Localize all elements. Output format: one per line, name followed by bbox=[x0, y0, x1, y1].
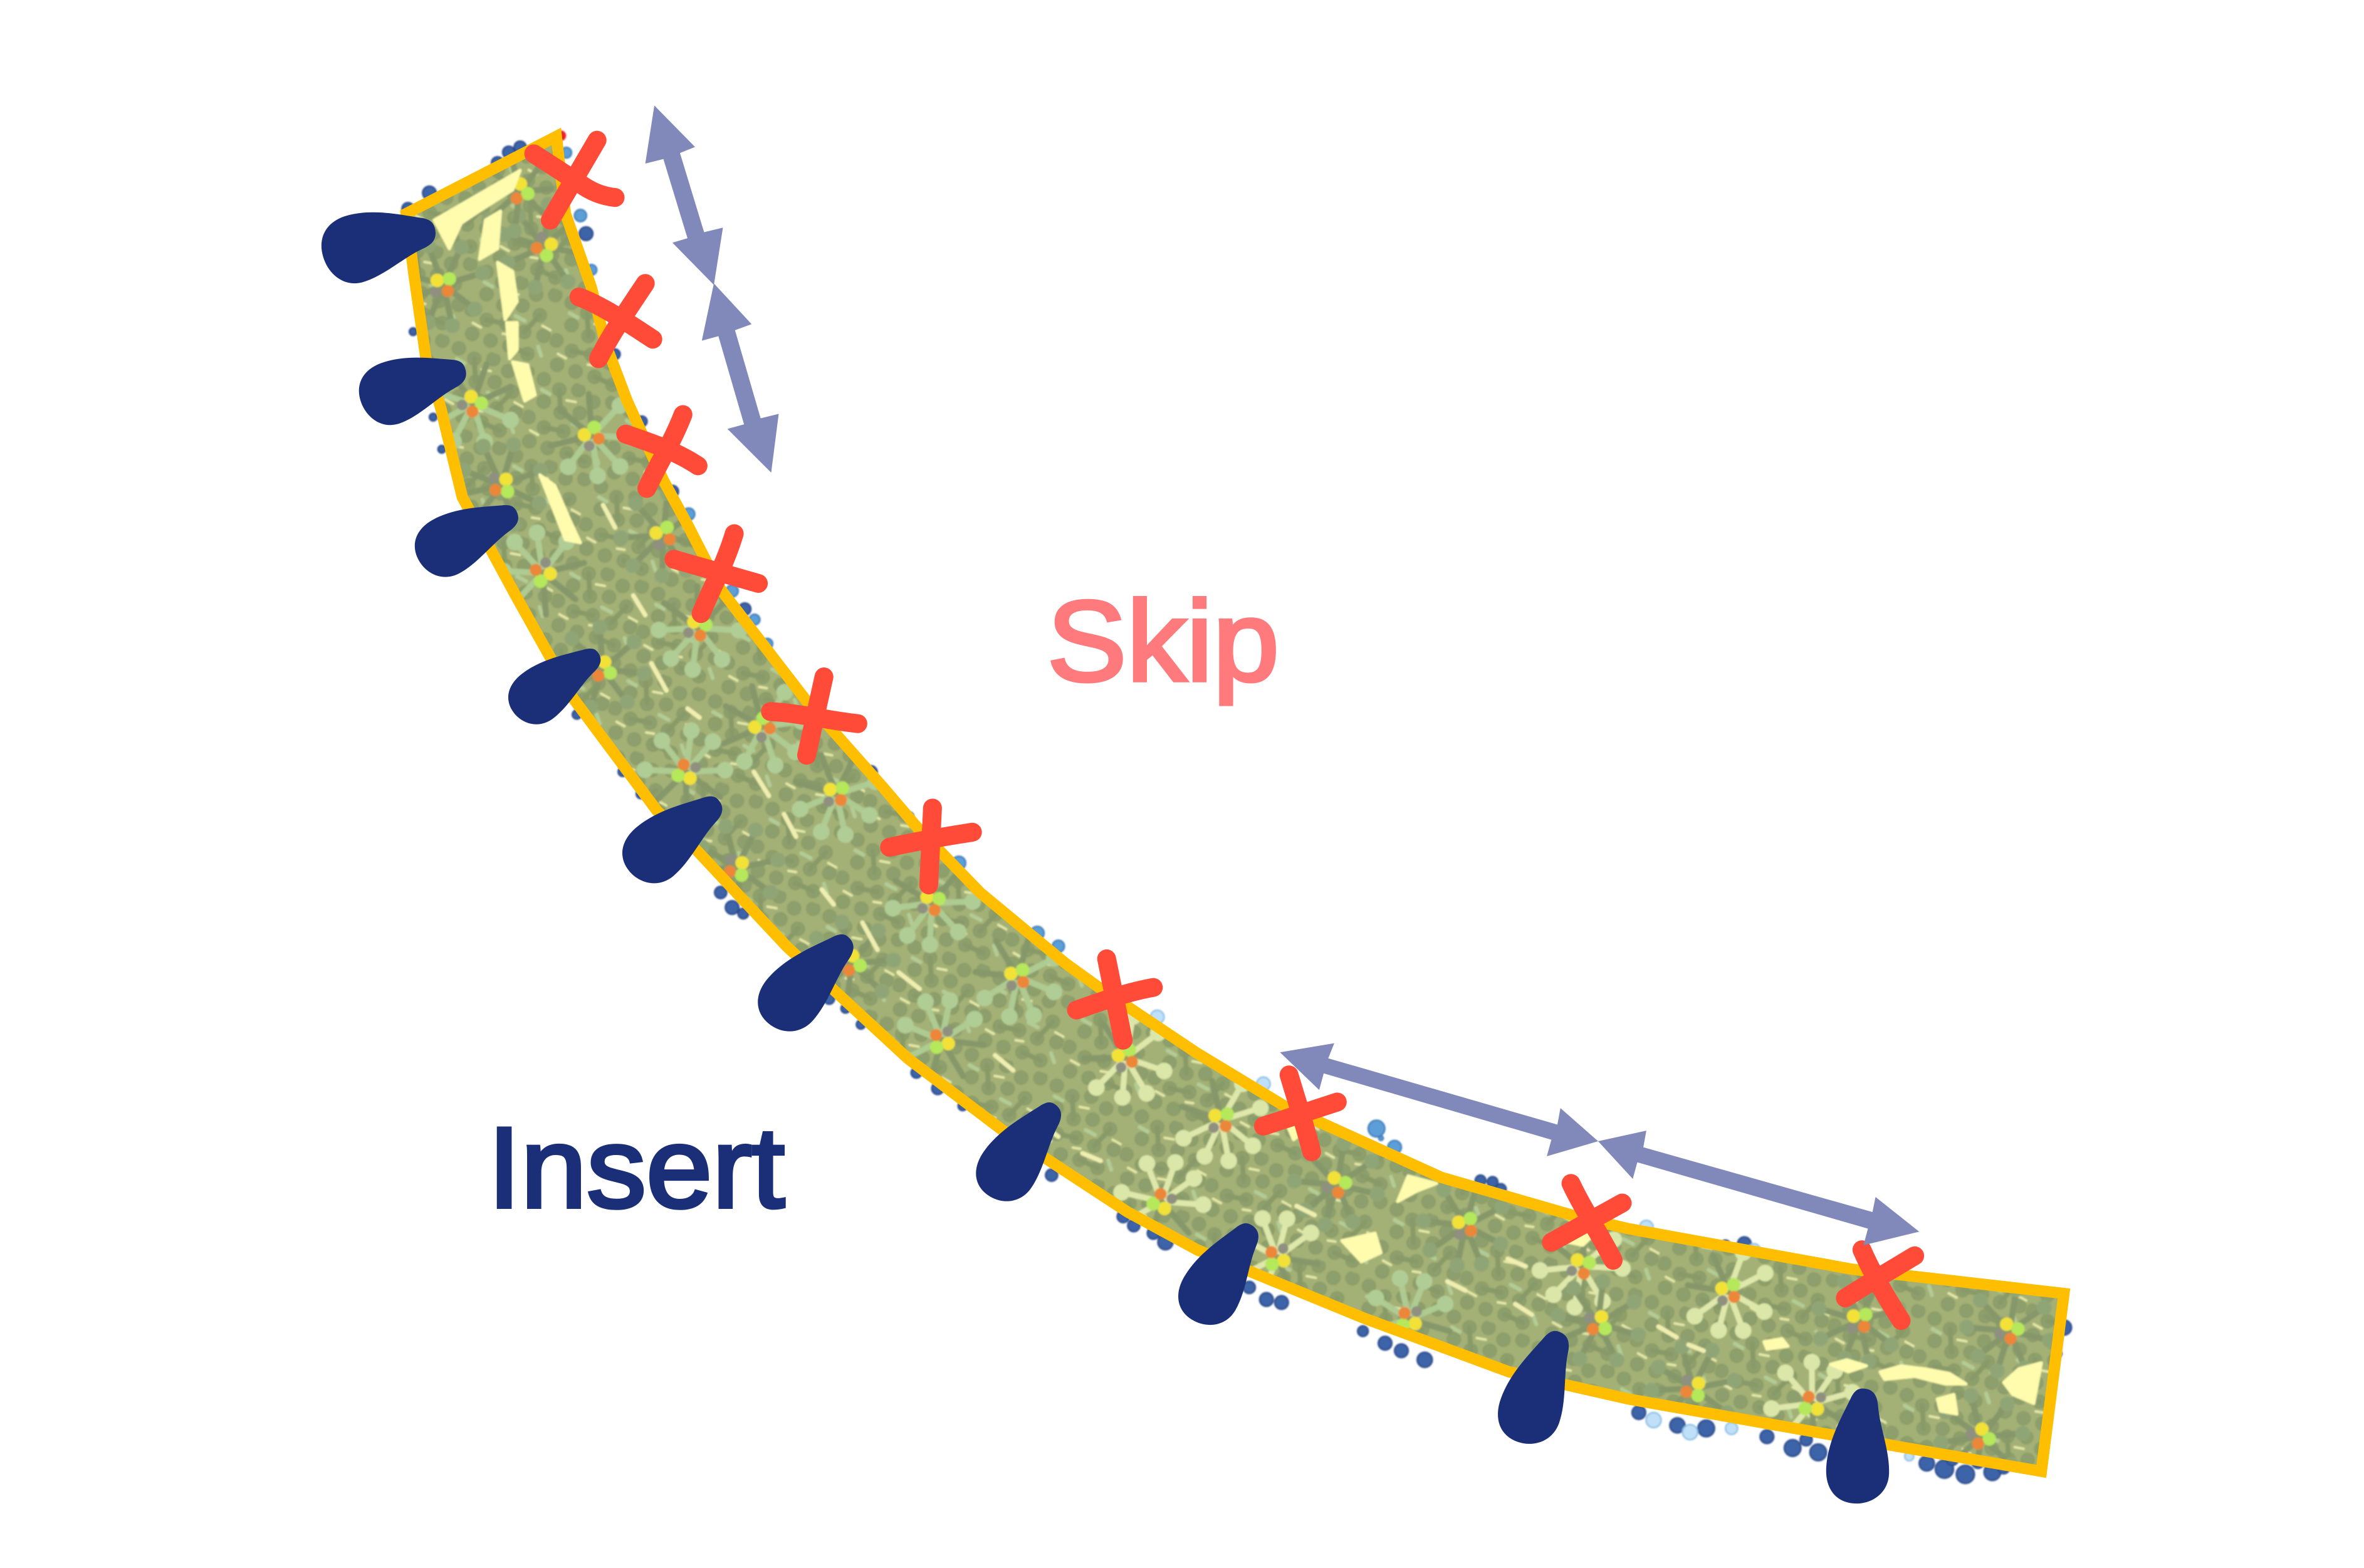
insert drop 3 bbox=[405, 483, 530, 587]
insert drop 7 bbox=[965, 1087, 1079, 1213]
cross 9 bbox=[1551, 1183, 1622, 1260]
insert drop 6 bbox=[746, 916, 871, 1044]
insert drop 4 bbox=[498, 630, 614, 735]
insert markers bbox=[314, 193, 1893, 1505]
label: Insert: Insert bbox=[488, 1103, 785, 1231]
cross 5 bbox=[770, 677, 858, 755]
arrow top 2 bbox=[702, 283, 779, 473]
arrow bottom 1 bbox=[1280, 1043, 1598, 1156]
cross 8 bbox=[1263, 1075, 1337, 1152]
insert drop 8 bbox=[1168, 1209, 1276, 1336]
skip crosses bbox=[534, 140, 1915, 1320]
insert drop 10 bbox=[1824, 1387, 1893, 1505]
cross 4 bbox=[674, 534, 758, 614]
insert drop 9 bbox=[1489, 1321, 1587, 1453]
pale flecks bbox=[603, 505, 1703, 1351]
cross 1 bbox=[534, 140, 615, 220]
pale gaps bbox=[434, 170, 2041, 1414]
cross 6 bbox=[889, 808, 973, 885]
cross 2 bbox=[579, 283, 653, 359]
arrow bottom 2 bbox=[1598, 1131, 1919, 1245]
band outline bbox=[406, 137, 2064, 1471]
arrow top 1 bbox=[646, 105, 723, 285]
blue particles outside the band bbox=[402, 130, 2071, 1483]
band of molecules bbox=[377, 105, 2096, 1508]
insert drop 1 bbox=[314, 193, 444, 291]
cross 3 bbox=[625, 415, 698, 488]
insert drop 2 bbox=[351, 337, 475, 433]
insert drop 5 bbox=[610, 776, 737, 896]
cross 7 bbox=[1077, 959, 1153, 1040]
label: Skip: Skip bbox=[1047, 577, 1279, 705]
cross 10 bbox=[1845, 1250, 1915, 1320]
molecule clusters bbox=[395, 127, 2074, 1502]
spacing arrows bbox=[646, 105, 1919, 1245]
